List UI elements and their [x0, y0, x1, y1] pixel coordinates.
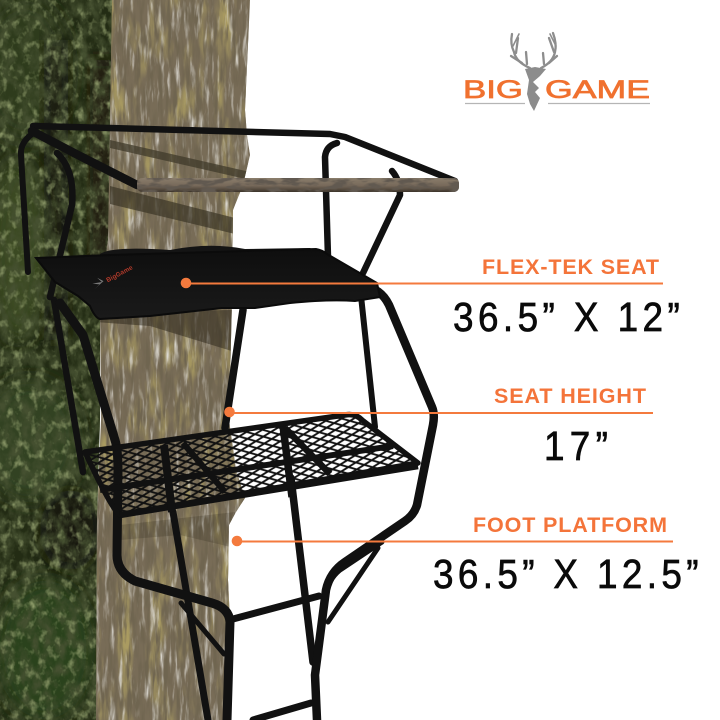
top rails	[32, 126, 455, 185]
callout: seat height: SEAT HEIGHT	[494, 384, 646, 408]
callout: foot platform: FOOT PLATFORM	[473, 513, 667, 537]
callout: foot platform	[232, 513, 698, 597]
deer antlers	[511, 33, 557, 68]
brand wordmark: GAME	[545, 76, 650, 104]
strap shadow lower	[110, 186, 235, 234]
callout: flex-tek seat: 36.5” X 12”	[453, 295, 680, 340]
brand wordmark	[463, 76, 650, 104]
ladder stand frame	[21, 126, 455, 720]
callout: flex-tek seat: FLEX-TEK SEAT	[482, 255, 659, 279]
seat shadow on trunk	[95, 310, 235, 352]
foot platform	[85, 414, 420, 517]
brand wordmark: BIG	[463, 76, 523, 104]
flex-tek seat	[36, 249, 380, 319]
seat logo	[90, 261, 134, 291]
callout: seat height	[224, 384, 653, 469]
callout: seat height: 17”	[544, 424, 608, 469]
right side rail	[315, 291, 434, 720]
rear uprights and ladder	[54, 296, 378, 720]
right lower second rail	[325, 542, 382, 596]
platform cross bars	[100, 426, 393, 512]
seat logo: BigGame	[105, 264, 134, 284]
deer head	[525, 67, 546, 111]
seat back straps	[100, 246, 317, 262]
left front rail	[60, 303, 230, 720]
logo underline	[465, 102, 650, 104]
strap shadow upper	[110, 140, 250, 180]
forest background	[0, 0, 120, 720]
big game logo	[463, 33, 650, 111]
callout: foot platform: 36.5” X 12.5”	[433, 552, 699, 597]
upper rear loops	[21, 134, 400, 297]
callout: flex-tek seat	[181, 255, 680, 340]
camo padded bar	[137, 178, 459, 192]
tree trunk	[90, 0, 255, 720]
platform shadow on trunk	[120, 512, 235, 548]
